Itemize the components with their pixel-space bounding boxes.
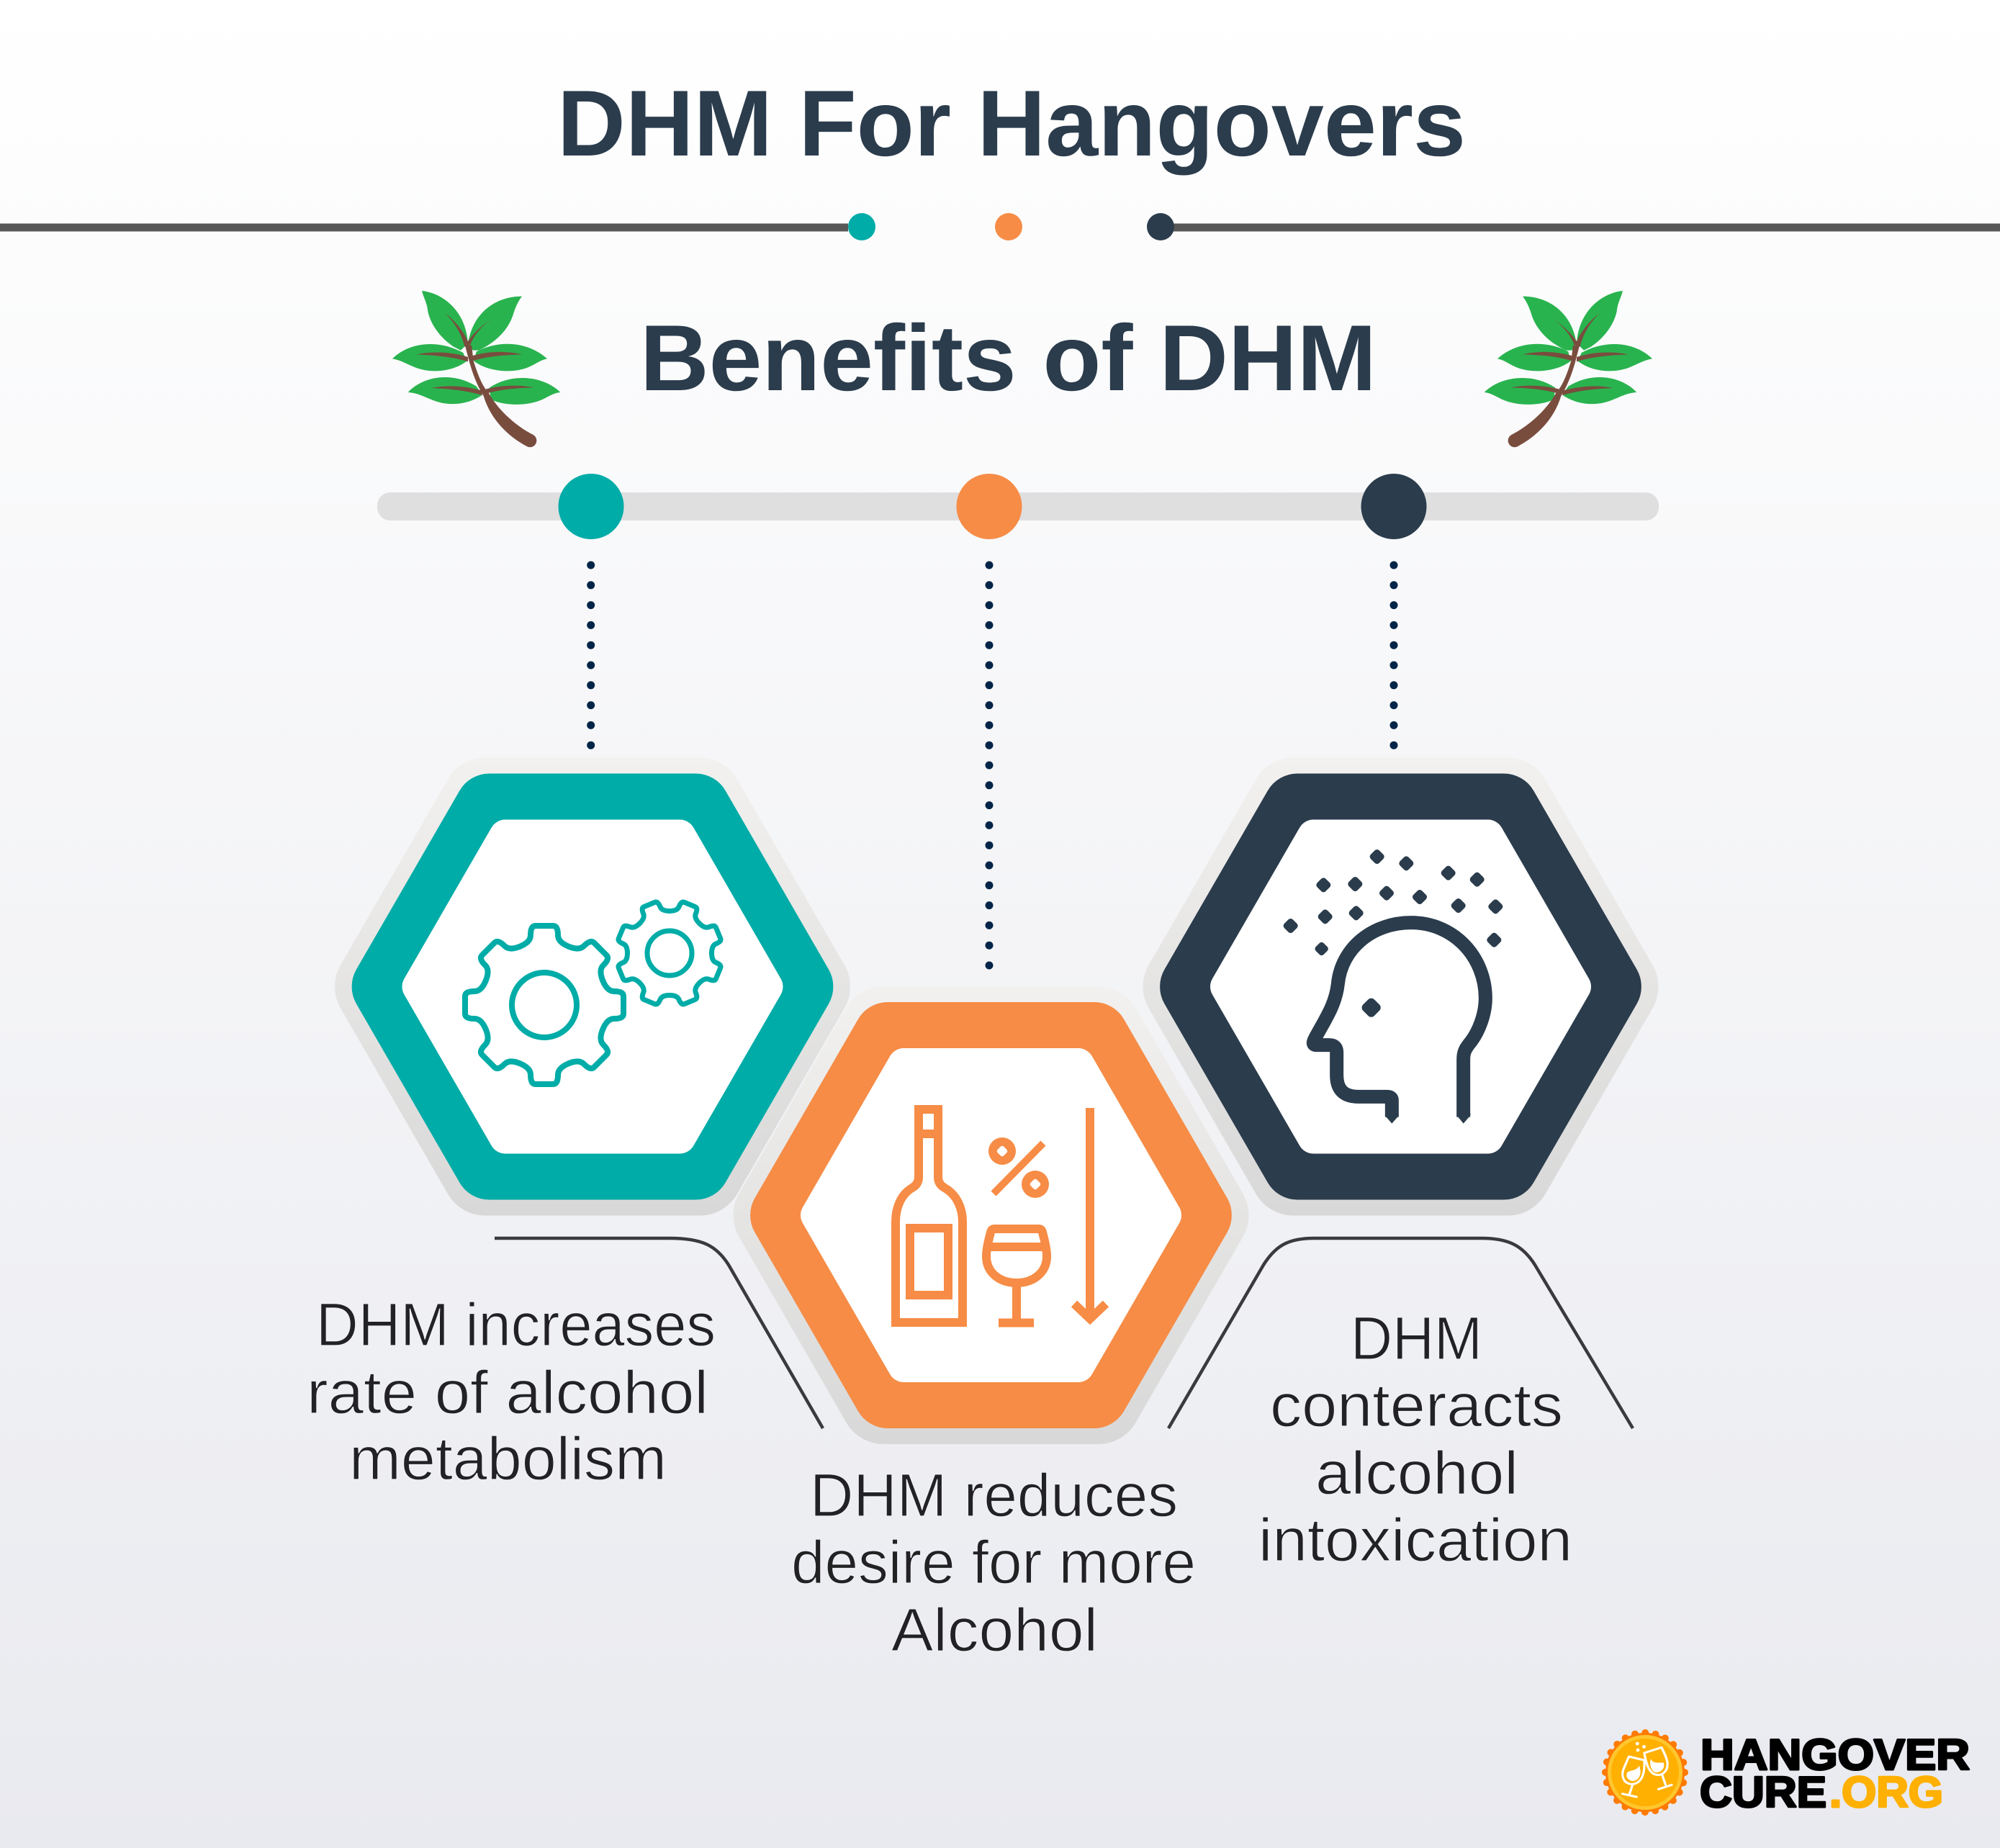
leader line: navy panel xyxy=(1168,1238,1633,1428)
title divider with three dots xyxy=(0,213,2000,240)
logo: Hangover Cure badge xyxy=(1605,1733,1685,1812)
text: orange panel caption: DHM reduces xyxy=(810,1461,1178,1529)
dotted connector: teal xyxy=(587,565,595,749)
text: orange panel caption xyxy=(791,1461,1196,1664)
dotted connector: orange xyxy=(985,565,994,969)
panel: teal hexagon xyxy=(378,801,807,1172)
title: DHM For Hangovers xyxy=(557,71,1466,176)
timeline node: navy xyxy=(1361,474,1427,539)
timeline node: teal xyxy=(559,474,623,539)
logo: wordmark xyxy=(1700,1731,1970,1816)
timeline bar xyxy=(377,492,1659,520)
icon: right leaf branch xyxy=(1485,291,1652,447)
subtitle: Benefits of DHM xyxy=(640,305,1377,410)
logo: wordmark: CURE xyxy=(1700,1768,1826,1816)
icon: gears xyxy=(465,884,739,1084)
text: teal panel caption: rate of alcohol xyxy=(307,1358,708,1426)
leader line: teal panel xyxy=(495,1238,823,1428)
text: teal panel caption: DHM increases xyxy=(316,1291,716,1358)
timeline node: orange xyxy=(956,474,1022,539)
text: navy panel caption: DHM xyxy=(1351,1304,1482,1372)
text: orange panel caption: desire for more xyxy=(791,1528,1196,1596)
text: navy panel caption xyxy=(1258,1304,1572,1574)
text: navy panel caption: alcohol xyxy=(1315,1439,1518,1507)
icon: bottle, glass, percent and down arrow xyxy=(896,1108,1106,1323)
logo: wordmark: HANGOVER xyxy=(1701,1731,1970,1779)
text: teal panel caption xyxy=(307,1291,716,1492)
text: teal panel caption: metabolism xyxy=(349,1425,667,1492)
text: navy panel caption: conteracts xyxy=(1270,1371,1563,1439)
icon: left leaf branch xyxy=(392,291,560,447)
panel: navy hexagon xyxy=(1186,801,1616,1172)
dotted connector: navy xyxy=(1389,565,1398,749)
panel: orange hexagon xyxy=(776,1029,1205,1401)
text: orange panel caption: Alcohol xyxy=(891,1596,1098,1664)
logo: wordmark: .ORG xyxy=(1829,1768,1943,1816)
text: navy panel caption: intoxication xyxy=(1258,1506,1572,1574)
icon: head with dizzy particles xyxy=(1282,848,1504,1124)
